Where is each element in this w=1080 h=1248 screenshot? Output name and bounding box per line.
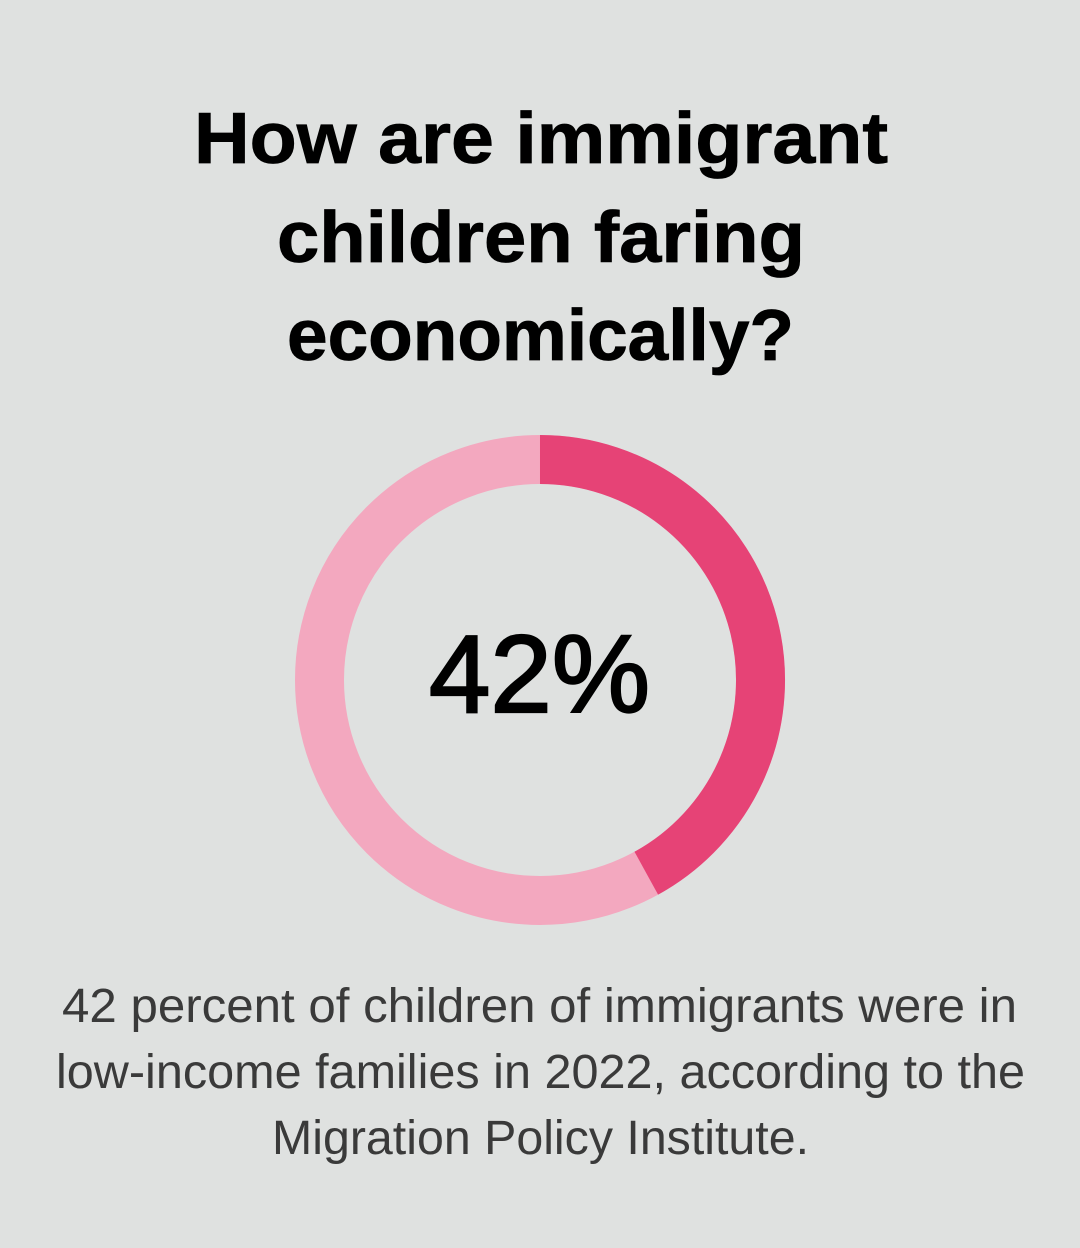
title: children faring [277,198,805,278]
donut track [320,460,760,900]
title: How are immigrant [194,99,888,179]
description text: 42 percent of children of immigrants were in [62,980,1017,1033]
donut value arc [540,460,761,873]
description text [56,980,1025,1165]
description text: low-income families in 2022, according to the [56,1046,1025,1099]
donut chart: 42 percent [320,460,761,900]
description text: Migration Policy Institute. [272,1112,809,1165]
title [194,99,888,376]
title: economically? [287,296,794,376]
percentage value: 42% [429,613,650,736]
